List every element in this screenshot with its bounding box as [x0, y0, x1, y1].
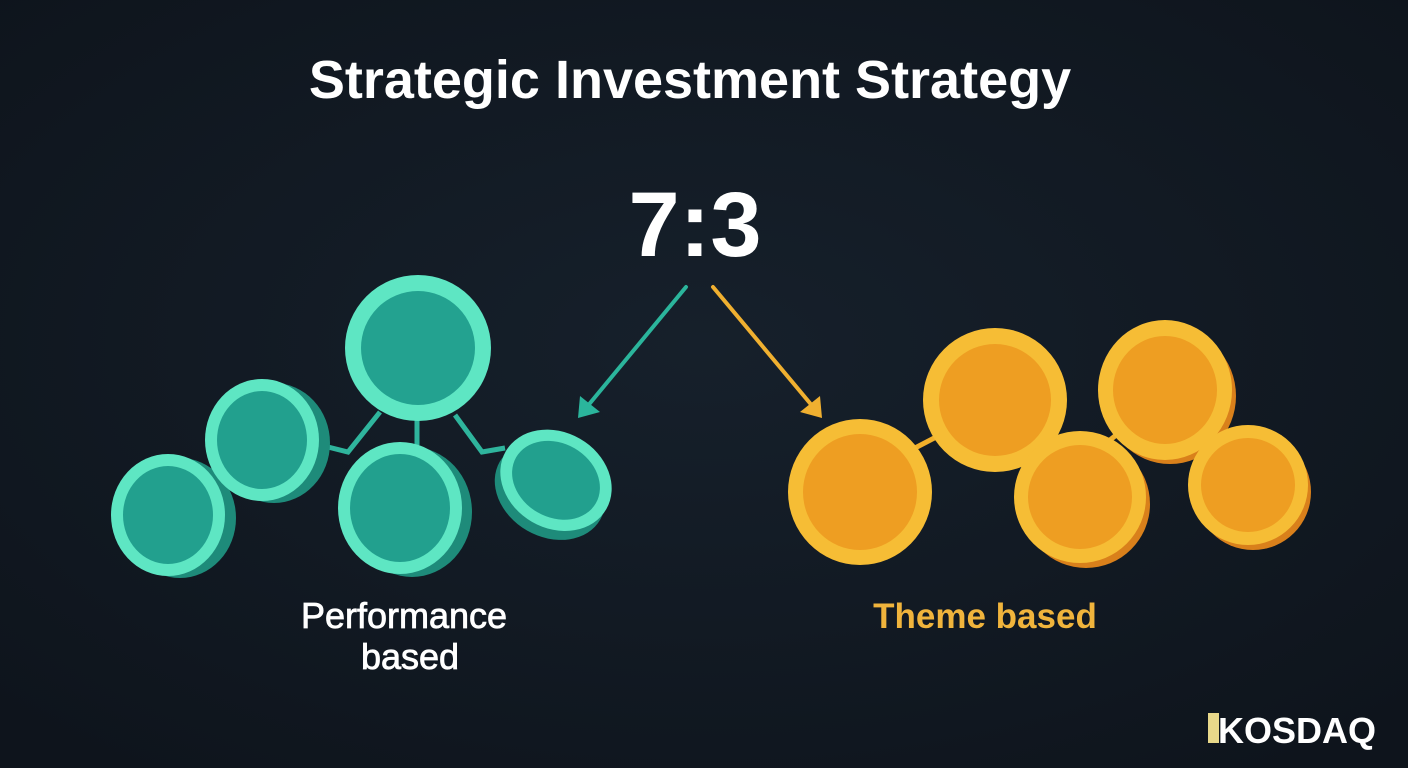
arrow: gold to theme	[713, 287, 822, 418]
label: theme based: Theme based	[873, 597, 1097, 636]
ratio 7:3: 7:3	[629, 174, 761, 276]
title: Strategic Investment Strategy	[309, 50, 1071, 110]
label: performance based: Performance	[301, 595, 507, 636]
arrow: teal to performance	[578, 287, 686, 418]
logo: KOSDAQ: KOSDAQ	[1218, 710, 1376, 751]
label: performance based: based	[361, 636, 459, 677]
teal coin cluster	[111, 275, 630, 578]
gold coin cluster	[788, 320, 1311, 568]
